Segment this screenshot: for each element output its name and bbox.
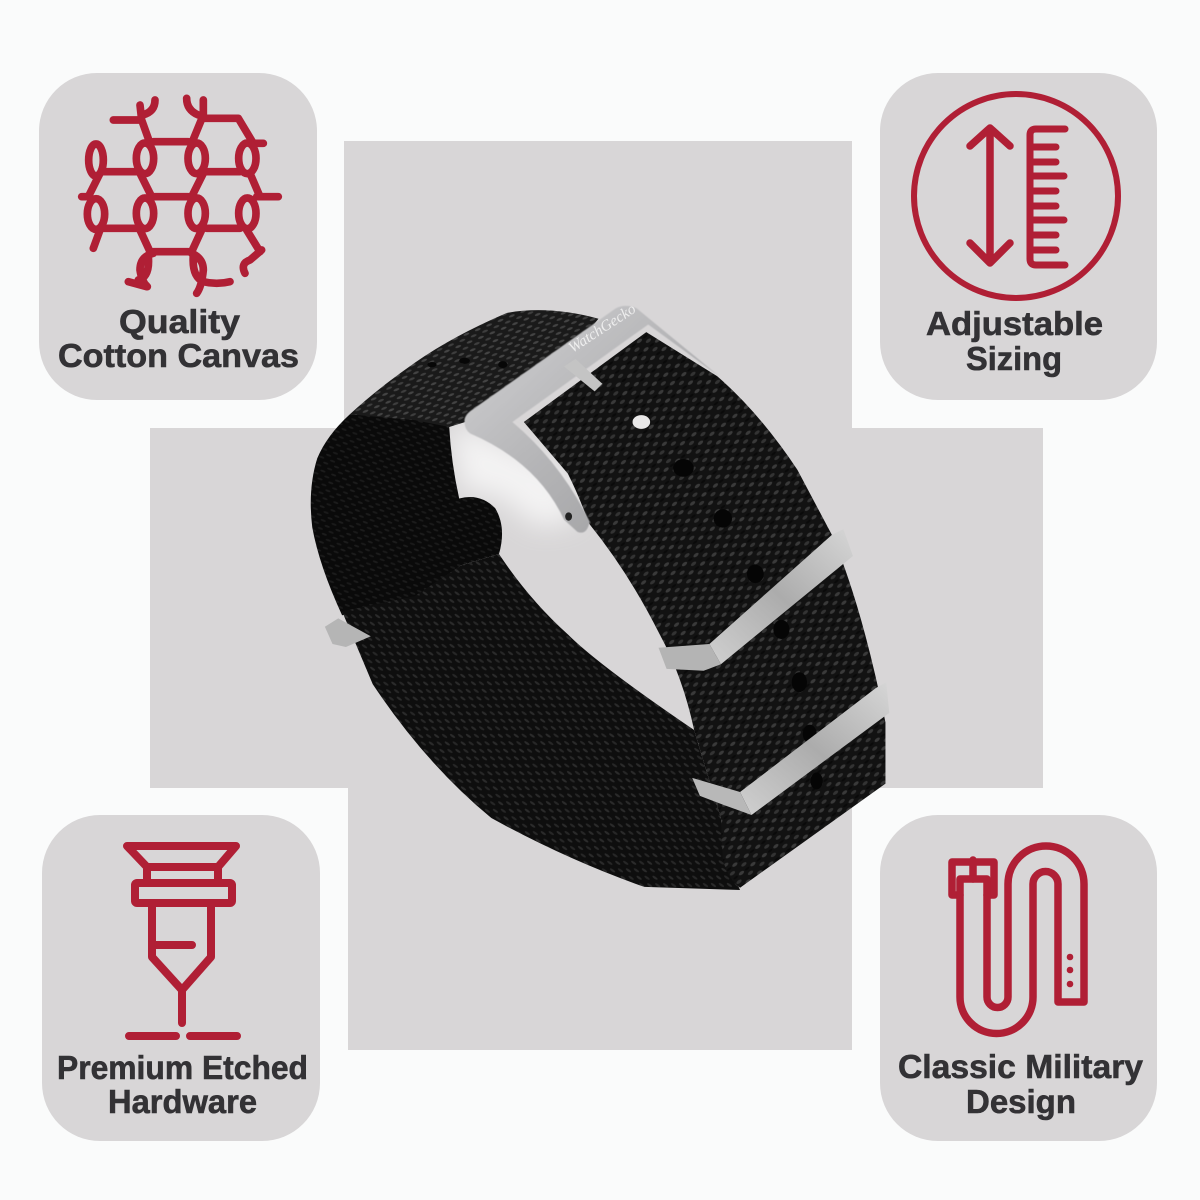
label: Hardware [108,1083,257,1120]
icon: laser etching head [127,846,237,1036]
card: Premium Etched Hardware [42,815,320,1141]
strap: lower long section [342,554,740,890]
card background [880,73,1157,400]
label: Design [966,1083,1076,1120]
steel keeper: middle bar [659,529,853,671]
buckle logo engraving: WatchGecko [565,300,639,356]
light glow inside strap loop [451,426,579,527]
icon: strap holes [1067,954,1073,987]
strap: holes on back section [427,358,507,368]
icon: woven mesh [82,98,278,293]
label: Premium Etched [57,1049,308,1086]
label: Adjustable [926,305,1103,342]
label [57,1049,308,1120]
buckle pivot hole [565,512,572,521]
label: Cotton Canvas [58,337,299,374]
steel keeper: lower bar [692,682,889,815]
steel keeper: left edge [325,618,371,647]
card: Quality Cotton Canvas [39,73,317,400]
buckle frame [464,306,719,533]
strap: left loop [311,414,502,615]
buckle pin [564,359,602,391]
card background [880,815,1157,1141]
strap: back section behind buckle [350,310,598,427]
central cross-shaped backdrop [150,141,1043,1050]
card background [39,73,317,400]
icon: circle with arrow and ruler [914,94,1118,298]
label: Classic Military [898,1048,1144,1085]
label [58,303,299,374]
product photo: black woven watch strap [311,300,889,890]
card: Classic Military Design [880,815,1157,1141]
label [898,1048,1144,1120]
strap: right section with holes [524,332,885,888]
label [926,305,1103,377]
icon: folded strap with buckle [952,846,1084,1034]
strap: punched holes [633,415,823,789]
card: Adjustable Sizing [880,73,1157,400]
label: Quality [119,303,241,340]
label: Sizing [966,340,1062,377]
card background [42,815,320,1141]
